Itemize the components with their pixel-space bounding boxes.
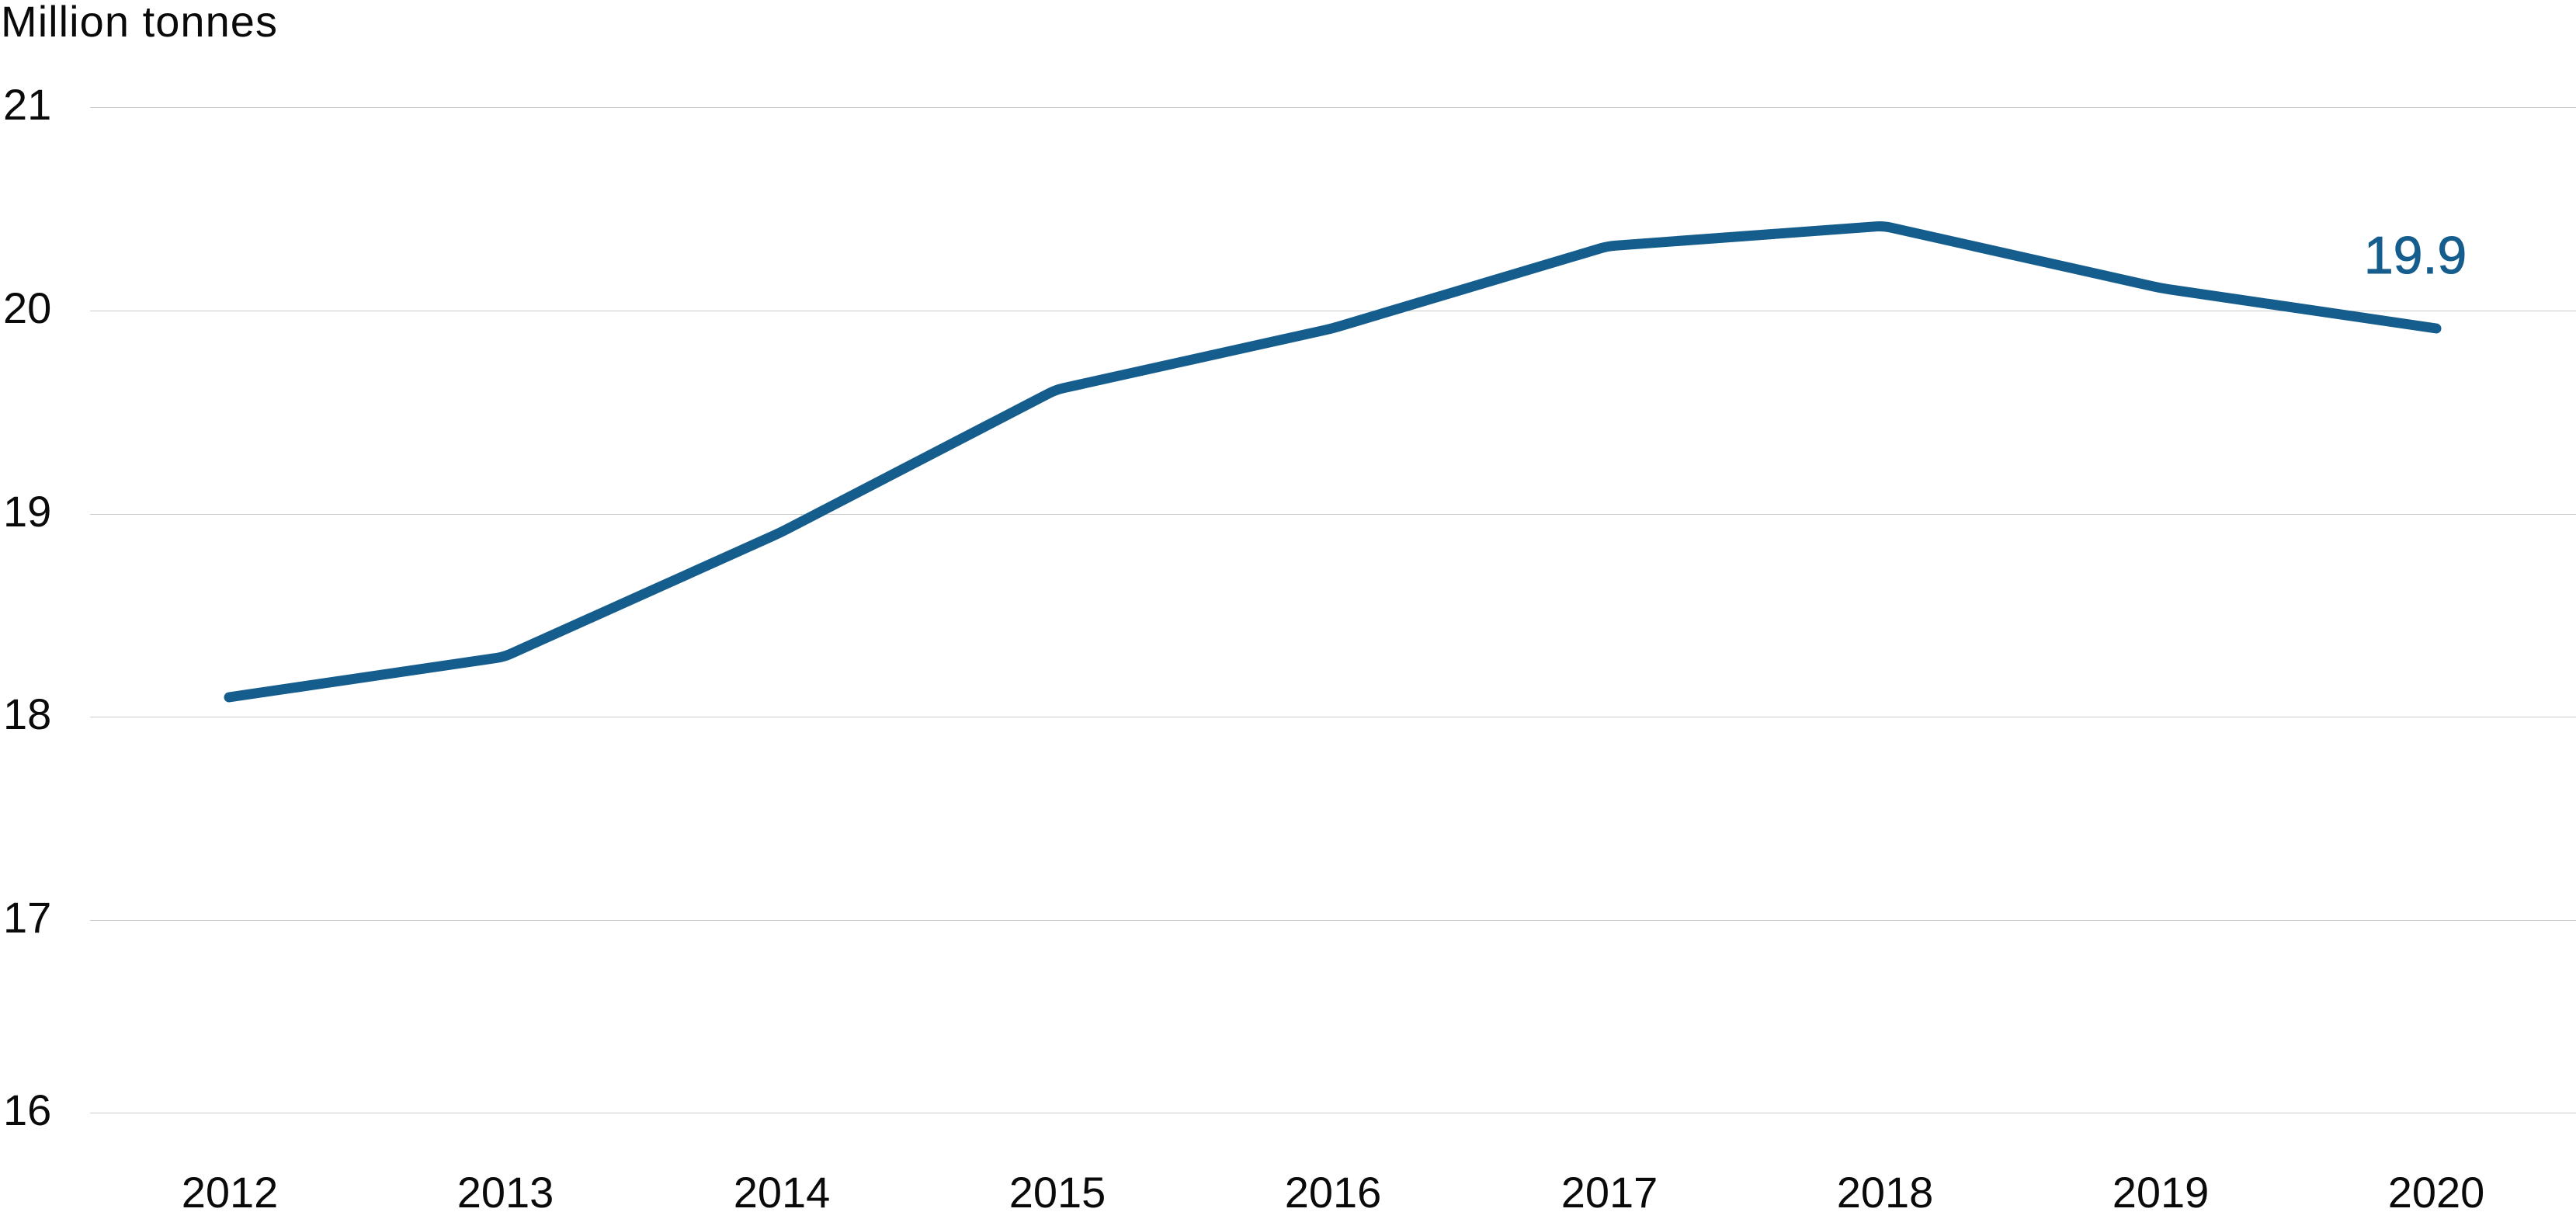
x-axis labels: 2014 [734, 1168, 830, 1217]
x-axis labels: 2017 [1561, 1168, 1658, 1217]
x-axis labels: 2013 [457, 1168, 554, 1217]
x-axis labels: 2016 [1285, 1168, 1381, 1217]
y-axis labels: 16 [3, 1085, 51, 1134]
x-axis labels: 2012 [182, 1168, 278, 1217]
y-axis labels: 19 [3, 487, 51, 536]
y-axis labels: 18 [3, 689, 51, 738]
x-axis labels [182, 1168, 2484, 1217]
x-axis labels: 2015 [1009, 1168, 1106, 1217]
x-axis labels: 2019 [2113, 1168, 2209, 1217]
value label: 19.9: 19.9 [2364, 226, 2467, 285]
y-axis labels: 21 [3, 80, 51, 129]
y-axis labels [3, 80, 51, 1134]
x-axis labels: 2020 [2388, 1168, 2484, 1217]
y-axis labels: 17 [3, 893, 51, 942]
x-axis labels: 2018 [1837, 1168, 1933, 1217]
y-axis labels: 20 [3, 283, 51, 332]
data line [229, 227, 2436, 697]
